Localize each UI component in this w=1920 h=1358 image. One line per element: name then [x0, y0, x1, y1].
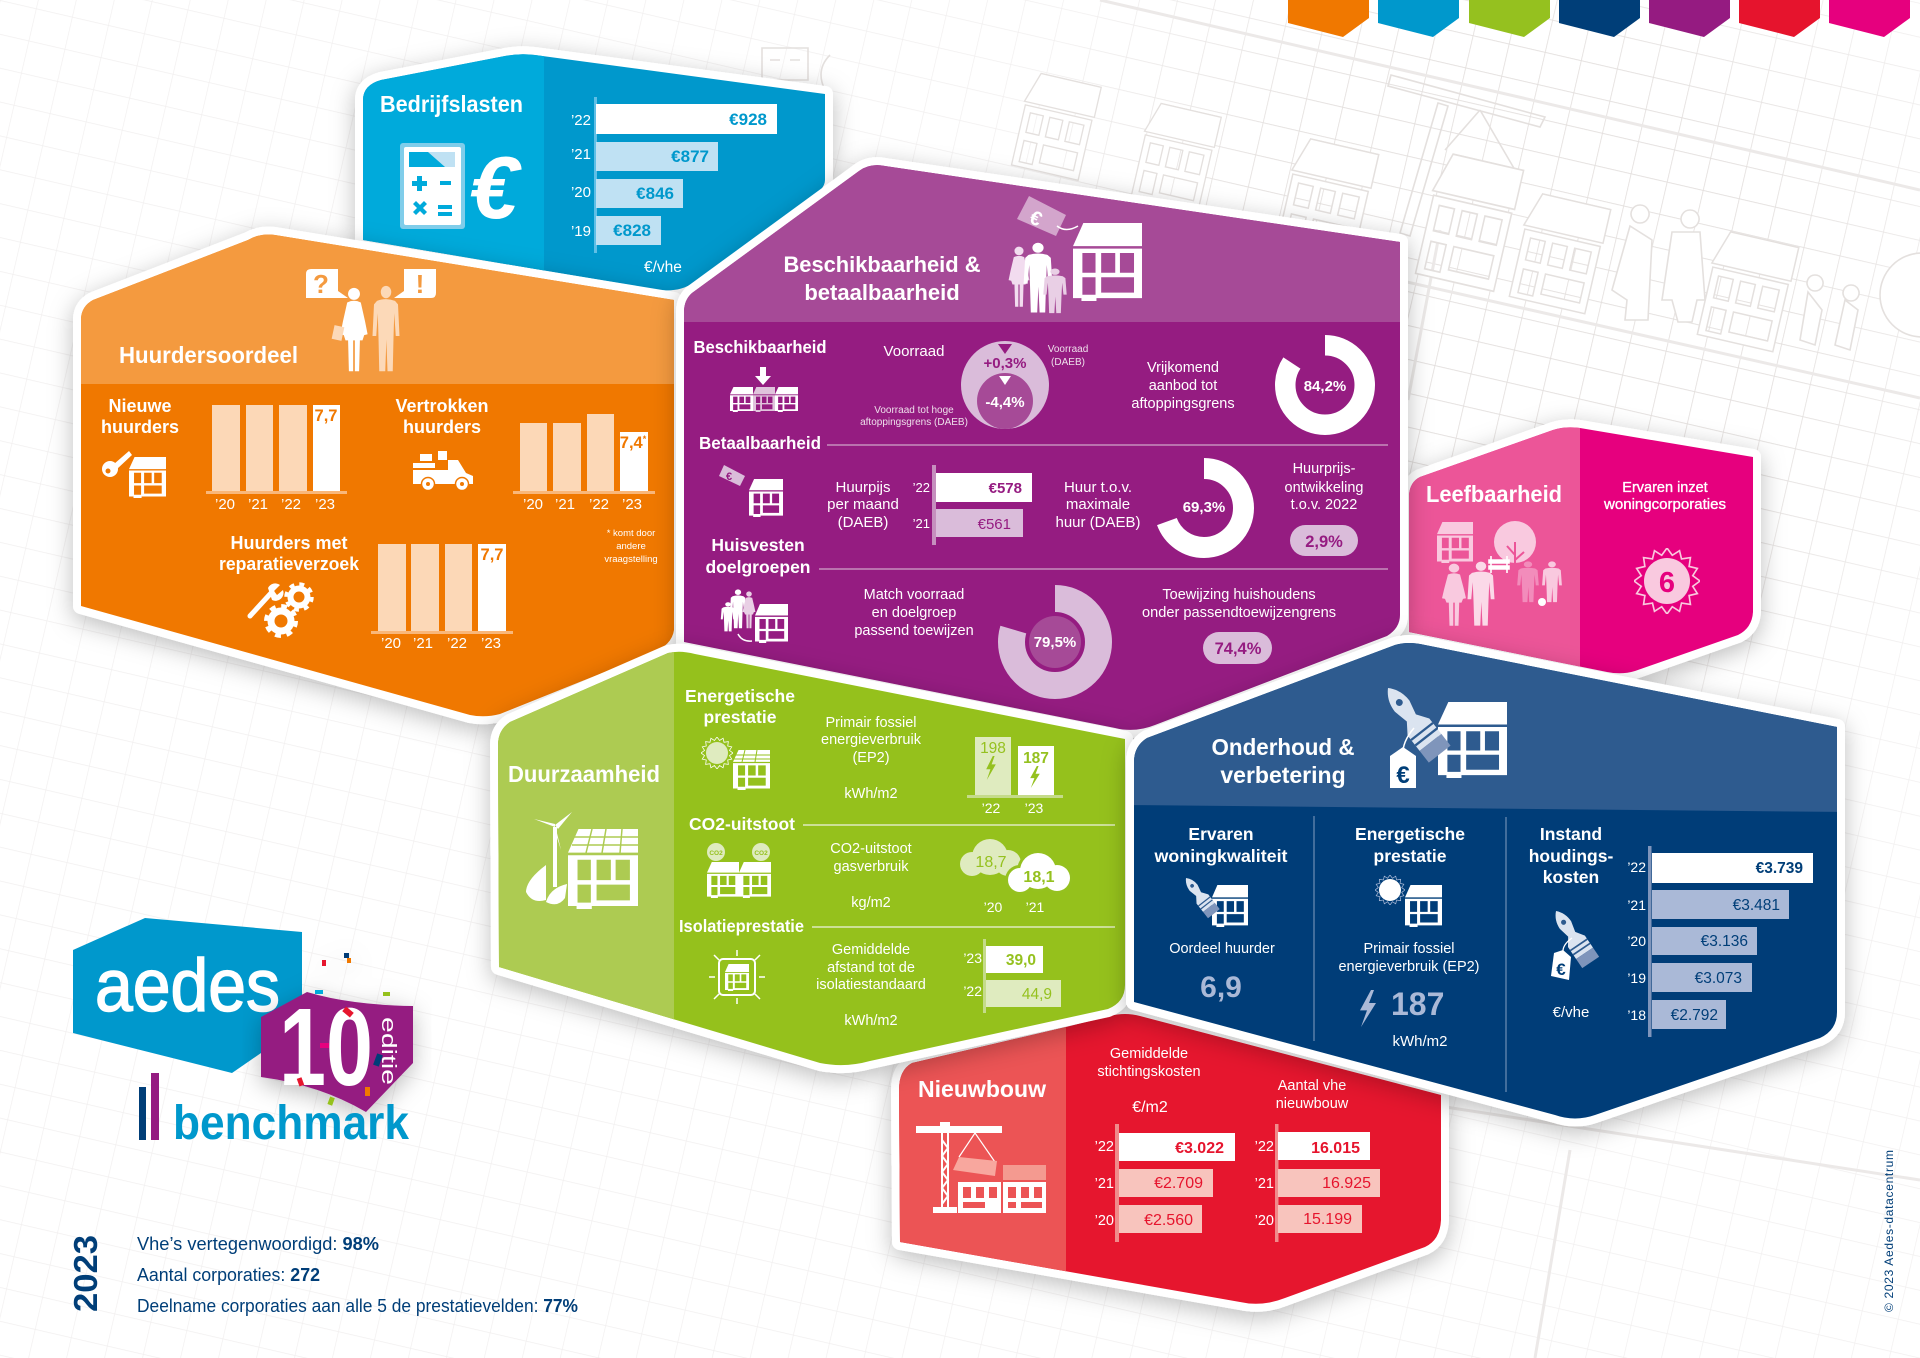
bar chart: vertrokken huurders: ’20 [523, 496, 543, 513]
subheading: Betaalbaarheid: Betaalbaarheid [699, 433, 821, 453]
panel: Huurdersoordeel [70, 225, 680, 716]
bar chart: energieverbruik: ’23 [1025, 800, 1044, 816]
donut: 84,2% [1285, 345, 1365, 425]
label: voorraad DAEB: Voorraad [1048, 344, 1088, 355]
text: CO2-uitstoot gasverbruik: kg/m2 [851, 895, 891, 911]
text: huurpijs per maand: per maand [827, 496, 899, 513]
chart: CO2 clouds: ’21 [1026, 899, 1045, 915]
chart: CO2 clouds: 18,7 [975, 854, 1007, 871]
note: andere vraagstelling: * komt door [607, 528, 655, 539]
icon: huurders with speech bubbles: ! [416, 269, 424, 299]
section: energetische prestatie: Primair fossiel [1363, 941, 1455, 957]
donut: 79,5%: 79,5% [1034, 634, 1076, 651]
bar chart: nieuwe huurders: ’21 [248, 496, 268, 513]
bar chart: bedrijfslasten per vhe: €928 [729, 110, 767, 129]
bar chart: vertrokken huurders: 7,4 [620, 434, 643, 452]
logo: benchmark [139, 1073, 409, 1150]
text: toewijzing huishoudens: onder passendtoewijzengrens [1142, 605, 1336, 621]
section: energetische prestatie: prestatie [1374, 846, 1447, 866]
text: vrijkomend aanbod: aanbod tot [1149, 378, 1217, 394]
bar chart: instandhoudingskosten: €3.739 [1756, 860, 1803, 877]
icon: tag and house [719, 465, 783, 517]
bar chart: vertrokken huurders [513, 414, 655, 513]
text: kerncijfers: Aantal corporaties: 272 [137, 1264, 321, 1285]
bar chart: nieuwe huurders: 7,7 [315, 407, 337, 425]
subheading: huurders met reparatieverzoek: Huurders met [230, 533, 348, 553]
bar chart: vertrokken huurders: ’21 [555, 496, 575, 513]
bar chart: isolatie: ’22 [963, 983, 982, 999]
text: primair fossiel: kWh/m2 [844, 786, 898, 802]
bar chart: huurpijs: €561 [978, 516, 1011, 533]
bar chart: reparatieverzoek: 7,7 [481, 546, 503, 564]
icon: insulated house [709, 950, 765, 1004]
bar chart: aantal vhe nieuwbouw [1255, 1124, 1380, 1242]
text: primair fossiel: energieverbruik [821, 732, 922, 748]
bar chart: energieverbruik: 187 [1023, 750, 1049, 767]
bar chart: bedrijfslasten per vhe: ’21 [571, 146, 591, 163]
icon: houses with CO2 clouds: CO2 [709, 850, 723, 857]
section: ervaren woningkwaliteit: Ervaren [1188, 824, 1254, 844]
bar chart: instandhoudingskosten: €3.136 [1701, 933, 1748, 950]
text: huur t.o.v. maximale huur: Huur t.o.v. [1064, 479, 1132, 496]
text: gemiddelde stichtingskosten: Gemiddelde [1110, 1046, 1188, 1062]
subheading: vertrokken huurders: Vertrokken [395, 396, 489, 416]
icon: tag family house [1009, 196, 1142, 313]
icon: row of houses with arrow [730, 367, 798, 412]
chart: CO2 clouds: 18,1 [1023, 869, 1055, 886]
icon: energy label and solar house [701, 737, 770, 790]
bar chart: instandhoudingskosten: €2.792 [1671, 1007, 1718, 1024]
text: huur t.o.v. maximale huur: huur (DAEB) [1055, 514, 1141, 531]
logo: aedes tag: aedes [95, 944, 280, 1027]
subheading: Huisvesten doelgroepen: doelgroepen [705, 557, 811, 577]
panel: Duurzaamheid [490, 640, 1125, 1065]
text: aantal vhe nieuwbouw: Aantal vhe [1278, 1078, 1346, 1094]
logo: aedes tag [73, 918, 302, 1073]
heading: beschikbaarheid en betaalbaarheid: betaalbaarheid [804, 280, 960, 305]
note: andere vraagstelling: andere [616, 541, 646, 552]
icon: calculator and euro [400, 138, 523, 237]
bar chart: isolatie [963, 939, 1061, 1013]
bar chart: reparatieverzoek [371, 544, 513, 652]
donut: 79,5% [1012, 598, 1098, 686]
text: gemiddelde afstand: kWh/m2 [844, 1013, 898, 1029]
heading: onderhoud en verbetering: verbetering [1220, 762, 1346, 788]
icon: tag family house: € [1026, 207, 1045, 231]
label: voorraad tot hoge aftoppingsgrens: Voorraad tot hoge [874, 405, 954, 416]
icon: turbine, leaves, solar house [526, 812, 638, 909]
text: gemiddelde afstand: afstand tot de [827, 960, 915, 976]
text: primair fossiel: (EP2) [852, 750, 890, 766]
icon: key and house [102, 451, 166, 498]
bar chart: vertrokken huurders: * [643, 434, 647, 444]
heading: Duurzaamheid: Duurzaamheid [508, 761, 660, 787]
text: huurprijsontwikkeling: Huurprijs- [1293, 461, 1356, 477]
section: energetische prestatie: energieverbruik (EP2) [1338, 959, 1480, 975]
bar chart: isolatie: 44,9 [1022, 986, 1052, 1003]
section: instandhoudingskosten [1529, 824, 1613, 1021]
icon: wrench and gears [250, 583, 312, 636]
icon: family and house [721, 589, 788, 643]
subheading: huurders met reparatieverzoek: reparatieverzoek [219, 554, 360, 574]
bar chart: huurpijs: €578 [989, 480, 1022, 497]
text: voorraad: Voorraad [884, 343, 944, 360]
bar chart: bedrijfslasten per vhe: ’19 [571, 223, 591, 240]
section: energetische prestatie: Energetische [1355, 824, 1465, 844]
bar chart: stichtingskosten: €3.022 [1175, 1140, 1224, 1157]
panel: Onderhoud en verbetering [1125, 630, 1845, 1118]
bar chart: bedrijfslasten per vhe [571, 97, 777, 276]
subheading: nieuwe huurders: huurders [101, 417, 179, 437]
text: match voorraad en doelgroep: en doelgroep [872, 605, 956, 621]
panel: Leefbaarheid [1400, 420, 1753, 680]
text: match voorraad en doelgroep: Match voorraad [864, 587, 964, 603]
bar chart: aantal vhe nieuwbouw: ’22 [1255, 1139, 1274, 1155]
logo: 10e editie flag [261, 953, 413, 1112]
icon: huurders with speech bubbles [306, 269, 436, 371]
icon: moving truck [413, 451, 473, 490]
bar chart: aantal vhe nieuwbouw: 16.015 [1311, 1140, 1360, 1157]
icon: score badge 6: 6 [1659, 567, 1675, 599]
pill: 74,4% [1203, 632, 1272, 664]
donut: 69,3% [1164, 468, 1244, 548]
bar chart: isolatie: 39,0 [1006, 952, 1036, 969]
bar chart: stichtingskosten [1095, 1124, 1235, 1242]
bar chart: aantal vhe nieuwbouw: 15.199 [1303, 1211, 1352, 1228]
bar chart: energieverbruik: ’22 [982, 800, 1001, 816]
text: CO2-uitstoot gasverbruik: gasverbruik [834, 859, 909, 875]
text: toewijzing huishoudens: Toewijzing huishoudens [1162, 587, 1316, 603]
bar chart: instandhoudingskosten: ’21 [1627, 897, 1646, 913]
subheading: nieuwe huurders: Nieuwe [108, 396, 172, 416]
icon: tag and house: € [726, 471, 732, 483]
text: huur t.o.v. maximale huur: maximale [1066, 496, 1130, 513]
heading: Leefbaarheid: Leefbaarheid [1426, 481, 1562, 507]
bar chart: reparatieverzoek: ’20 [381, 635, 401, 652]
pill: 74,4%: 74,4% [1215, 640, 1262, 658]
section: energetische prestatie: kWh/m2 [1392, 1033, 1448, 1050]
section: instandhoudingskosten: € [1556, 960, 1566, 979]
pill: 2,9% [1290, 525, 1358, 556]
bar chart: nieuwe huurders: ’22 [281, 496, 301, 513]
subheading: Beschikbaarheid: Beschikbaarheid [694, 337, 826, 357]
panel: Bedrijfslasten [350, 40, 825, 290]
bar chart: stichtingskosten: €2.709 [1154, 1175, 1203, 1192]
subheading: Energetische prestatie: prestatie [704, 707, 777, 727]
text: ervaren inzet: woningcorporaties [1603, 497, 1726, 513]
bar chart: instandhoudingskosten [1627, 846, 1813, 1037]
panel: Beschikbaarheid en betaalbaarheid [680, 160, 1405, 730]
section: instandhoudingskosten: houdings- [1529, 846, 1613, 866]
icon: houses with CO2 clouds: CO2 [754, 850, 768, 857]
bar chart: nieuwe huurders [206, 405, 347, 513]
chart: CO2 clouds: ’20 [984, 899, 1003, 915]
bar chart: aantal vhe nieuwbouw: ’21 [1255, 1176, 1274, 1192]
text: primair fossiel: Primair fossiel [825, 715, 917, 731]
text: gemiddelde afstand: isolatiestandaard [816, 977, 926, 993]
text: ervaren inzet: Ervaren inzet [1622, 480, 1708, 496]
note: andere vraagstelling: vraagstelling [604, 554, 658, 565]
bar chart: energieverbruik: 198 [980, 740, 1006, 757]
text: gemiddelde afstand: Gemiddelde [832, 942, 910, 958]
bar chart: huurpijs: ’21 [913, 516, 930, 531]
text: kerncijfers: Deelname corporaties aan alle 5 de prestatievelden: 77% [137, 1295, 580, 1316]
section: instandhoudingskosten: kosten [1543, 867, 1599, 887]
bar chart: bedrijfslasten per vhe: €/vhe [644, 259, 682, 276]
bar chart: stichtingskosten: ’21 [1095, 1176, 1114, 1192]
bar chart: instandhoudingskosten: ’22 [1627, 859, 1646, 875]
chart: CO2 clouds [960, 839, 1073, 915]
subheading: Energetische prestatie: Energetische [685, 686, 795, 706]
text: huurprijsontwikkeling: ontwikkeling [1284, 480, 1364, 496]
label: voorraad tot hoge aftoppingsgrens: aftoppingsgrens (DAEB) [860, 417, 968, 428]
logo: 10e editie flag: editie [377, 1017, 399, 1085]
bar chart: instandhoudingskosten: €3.073 [1695, 970, 1742, 987]
icon: houses with CO2 clouds [707, 843, 771, 898]
bar chart: reparatieverzoek: ’23 [481, 635, 501, 652]
bar chart: aantal vhe nieuwbouw: ’20 [1255, 1213, 1274, 1229]
text: copyright: © 2023 Aedes-datacentrum [1882, 1150, 1896, 1312]
section: instandhoudingskosten: €/vhe [1553, 1004, 1589, 1021]
bar chart: bedrijfslasten per vhe: ’20 [571, 184, 591, 201]
subheading: CO2-uitstoot: CO2-uitstoot [689, 814, 795, 834]
bar chart: reparatieverzoek: ’22 [447, 635, 467, 652]
bar chart: stichtingskosten: €2.560 [1144, 1212, 1193, 1229]
heading: Huurdersoordeel: Huurdersoordeel [119, 342, 298, 368]
bar chart: bedrijfslasten per vhe: ’22 [571, 112, 591, 129]
text: huurprijsontwikkeling: t.o.v. 2022 [1291, 497, 1357, 513]
bar chart: instandhoudingskosten: ’18 [1627, 1007, 1646, 1023]
text: kerncijfers: Vhe’s vertegenwoordigd: 98% [137, 1233, 380, 1254]
chart: voorraad circles: -4,4% [985, 394, 1025, 411]
bar chart: huurpijs [913, 465, 1032, 545]
chart: voorraad circles: +0,3% [984, 355, 1026, 372]
heading: beschikbaarheid en betaalbaarheid: Beschikbaarheid & [784, 252, 981, 277]
heading: Nieuwbouw: Nieuwbouw [918, 1076, 1046, 1102]
bar chart: nieuwe huurders: ’20 [215, 496, 235, 513]
subheading: Isolatieprestatie: Isolatieprestatie [679, 916, 804, 936]
donut: 84,2%: 84,2% [1304, 378, 1346, 395]
section: ervaren woningkwaliteit: Oordeel huurder [1169, 941, 1275, 957]
logo: benchmark: benchmark [173, 1097, 409, 1150]
bar chart: vertrokken huurders: ’22 [589, 496, 609, 513]
section: ervaren woningkwaliteit: 6,9 [1200, 971, 1242, 1004]
text: aantal vhe nieuwbouw: nieuwbouw [1276, 1096, 1349, 1112]
year: 2023: 2023 [67, 1235, 104, 1312]
icon: calculator and euro: € [470, 138, 523, 237]
bar chart: huurpijs: ’22 [913, 480, 930, 495]
icon: brush, tag, house: € [1396, 762, 1410, 789]
text: gemiddelde stichtingskosten: stichtingskosten [1097, 1064, 1201, 1080]
text: CO2-uitstoot gasverbruik: CO2-uitstoot [830, 841, 912, 857]
donut: 69,3%: 69,3% [1183, 499, 1225, 516]
text: vrijkomend aanbod: Vrijkomend [1147, 360, 1219, 376]
navigation: coloured tabs [1288, 0, 1910, 37]
text: vrijkomend aanbod: aftoppingsgrens [1131, 396, 1235, 412]
icon: crane and houses [916, 1122, 1046, 1213]
bar chart: bedrijfslasten per vhe: €828 [613, 221, 651, 240]
section: energetische prestatie: 187 [1391, 986, 1444, 1022]
text: huurpijs per maand: (DAEB) [838, 514, 888, 531]
bar chart: vertrokken huurders: ’23 [622, 496, 642, 513]
panel: Nieuwbouw [890, 1000, 1441, 1304]
bar chart: energieverbruik [967, 737, 1063, 816]
section: ervaren woningkwaliteit [1153, 824, 1288, 1004]
bar chart: bedrijfslasten per vhe: €846 [636, 184, 674, 203]
label: voorraad DAEB: (DAEB) [1051, 357, 1085, 368]
icon: brush, tag, house [1377, 680, 1507, 789]
section: instandhoudingskosten: Instand [1540, 824, 1602, 844]
text: match voorraad en doelgroep: passend toewijzen [854, 623, 974, 639]
bar chart: stichtingskosten: ’20 [1095, 1213, 1114, 1229]
icon: huurders with speech bubbles: ? [313, 269, 329, 299]
bar chart: aantal vhe nieuwbouw: 16.925 [1322, 1175, 1371, 1192]
subheading: Huisvesten doelgroepen: Huisvesten [711, 535, 805, 555]
bar chart: instandhoudingskosten: ’20 [1627, 933, 1646, 949]
bar chart: reparatieverzoek: ’21 [413, 635, 433, 652]
icon: neighbourhood scene [1437, 521, 1562, 626]
bar chart: isolatie: ’23 [963, 950, 982, 966]
bar chart: nieuwe huurders: ’23 [315, 496, 335, 513]
heading: Bedrijfslasten: Bedrijfslasten [380, 91, 523, 117]
icon: score badge 6 [1634, 548, 1700, 614]
heading: onderhoud en verbetering: Onderhoud & [1212, 734, 1354, 760]
logo: 10e editie flag: 10 [279, 986, 373, 1109]
chart: voorraad circles [961, 341, 1049, 429]
bar chart: instandhoudingskosten: €3.481 [1733, 897, 1780, 914]
bar chart: stichtingskosten: ’22 [1095, 1139, 1114, 1155]
subheading: vertrokken huurders: huurders [403, 417, 481, 437]
text: gemiddelde stichtingskosten: €/m2 [1132, 1099, 1168, 1116]
bar chart: bedrijfslasten per vhe: €877 [671, 147, 709, 166]
pill: 2,9%: 2,9% [1305, 533, 1343, 551]
section: ervaren woningkwaliteit: woningkwaliteit [1153, 846, 1288, 866]
bar chart: instandhoudingskosten: ’19 [1627, 970, 1646, 986]
section: energetische prestatie [1338, 824, 1480, 1050]
text: huurpijs per maand: Huurpijs [835, 479, 891, 496]
